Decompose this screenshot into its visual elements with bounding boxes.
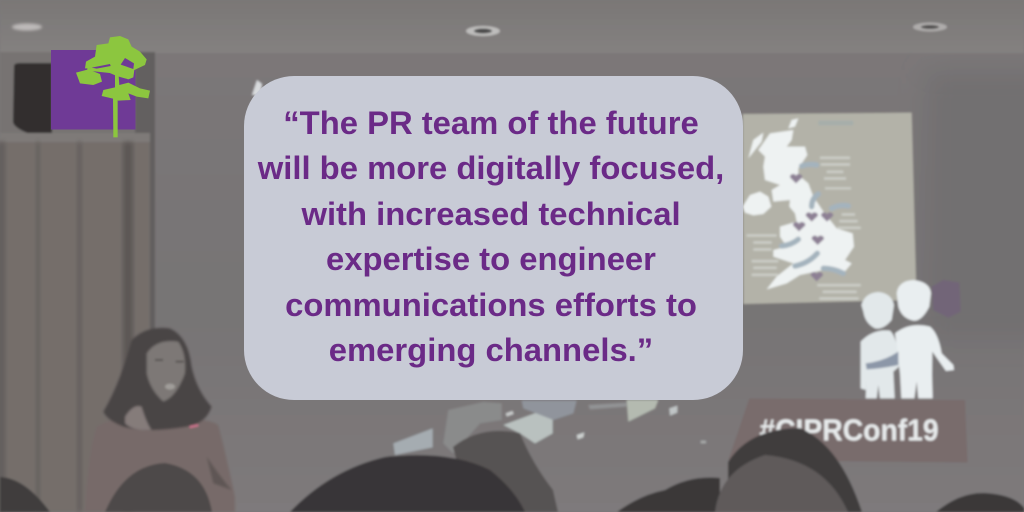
quote speech panel [244, 76, 743, 400]
hair [103, 328, 212, 430]
quote text: will be more digitally focused, [258, 149, 724, 186]
left person [861, 292, 899, 398]
purple hexagon [932, 280, 961, 318]
quote text: emerging channels.” [329, 331, 653, 368]
banner shape [728, 398, 968, 463]
sash [866, 352, 898, 369]
wall shading right [925, 70, 1024, 340]
quote text: with increased technical [301, 195, 681, 232]
map captions (illegible) [747, 121, 861, 300]
lanyard clip [189, 424, 199, 428]
logo: tree gaps [92, 58, 134, 83]
audience heads [0, 428, 1024, 512]
head below speaker [105, 463, 212, 512]
big dark head [290, 455, 525, 512]
projected slide fragments [393, 400, 706, 455]
grey curly head [715, 455, 848, 512]
bun hair head [453, 431, 558, 512]
dark head behind [728, 428, 862, 512]
cardigan [85, 418, 235, 512]
face [147, 341, 185, 402]
shelf [0, 133, 155, 142]
small dark head [617, 478, 720, 512]
slide panel [743, 113, 916, 304]
UK map [743, 118, 854, 289]
face features [155, 359, 184, 390]
projected people illustration [861, 280, 961, 398]
hashtag banner [728, 398, 968, 463]
far right head [936, 493, 1024, 512]
dark column edge [135, 52, 155, 136]
ceiling lights [12, 22, 947, 36]
map arrows [782, 164, 848, 273]
quote text: “The PR team of the future [283, 104, 699, 141]
logo: green pine tree [76, 36, 150, 137]
projected UK map slide [743, 113, 916, 304]
curtains [0, 53, 155, 512]
hashtag text: #CIPRConf19 [759, 413, 939, 447]
hair highlight [125, 406, 152, 430]
quote text [258, 104, 724, 368]
speaker presenter [85, 328, 235, 512]
quote text: communications efforts to [285, 286, 697, 323]
left edge of projection spot [252, 80, 262, 95]
speaker [13, 63, 52, 135]
ceiling [0, 0, 1024, 53]
arm shadow [207, 457, 232, 490]
map hearts [790, 174, 833, 281]
logo: purple square [51, 50, 136, 130]
left wall panel [0, 52, 155, 136]
quote text: expertise to engineer [326, 240, 656, 277]
head left [0, 477, 50, 512]
right person [895, 280, 954, 398]
